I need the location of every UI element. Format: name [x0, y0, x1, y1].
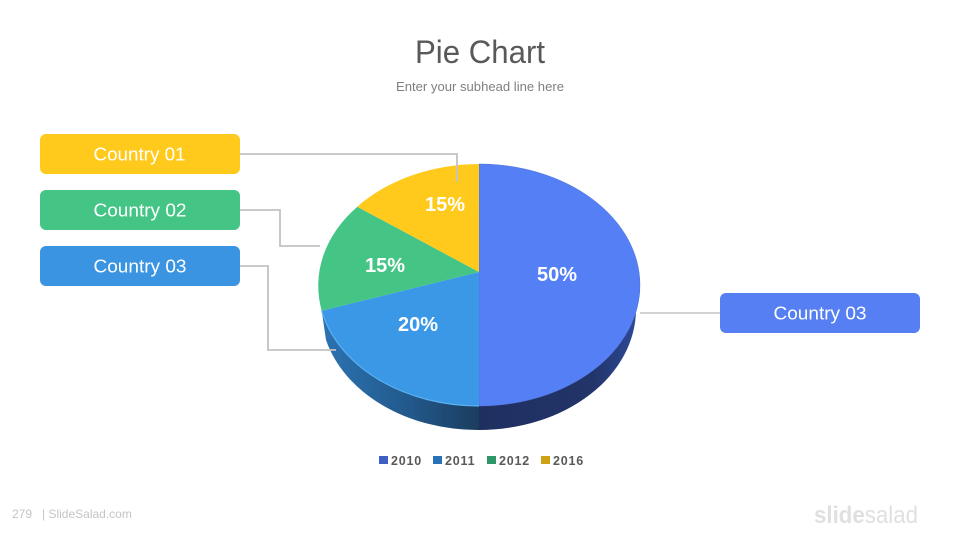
- connector: country 01: [240, 154, 457, 182]
- legend item: 2016: 2016: [553, 454, 584, 468]
- value: 15% green: 15%: [365, 255, 405, 277]
- label: country 03 right: [720, 293, 920, 333]
- label: country 01: Country 01: [94, 144, 186, 164]
- slice: 50%: [479, 164, 640, 406]
- legend item: 2012: 2012: [499, 454, 530, 468]
- label: country 02: Country 02: [94, 200, 186, 220]
- legend: [379, 454, 584, 468]
- connector: country 03 left: [240, 266, 336, 350]
- slice: 20%: [322, 272, 479, 406]
- legend item: 2010: 2010: [391, 454, 422, 468]
- logo: slidesalad: slidesalad: [814, 502, 918, 529]
- value: 15% yellow: 15%: [425, 194, 465, 216]
- slice: 15% green: [318, 207, 479, 311]
- label: country 03: [40, 246, 240, 286]
- label: country 01: [40, 134, 240, 174]
- slice highlight: [322, 311, 479, 406]
- value: 50%: 50%: [537, 264, 577, 286]
- connector: country 02: [240, 210, 320, 246]
- slice: 15% yellow: [357, 164, 479, 272]
- 3D pie chart: [318, 164, 640, 430]
- label: country 03 right: Country 03: [774, 302, 866, 324]
- connector: country 03 right: [640, 312, 720, 314]
- pie side: right: [479, 285, 640, 430]
- page number and site: 279 | SlideSalad.com: [12, 507, 132, 521]
- subhead: Enter your subhead line here: [396, 79, 564, 94]
- legend item: 2011: 2011: [445, 454, 475, 468]
- label: country 03: Country 03: [94, 256, 186, 276]
- label: country 02: [40, 190, 240, 230]
- pie side: left: [322, 311, 479, 430]
- title: Pie Chart: [415, 34, 545, 70]
- value: 20%: 20%: [398, 314, 438, 336]
